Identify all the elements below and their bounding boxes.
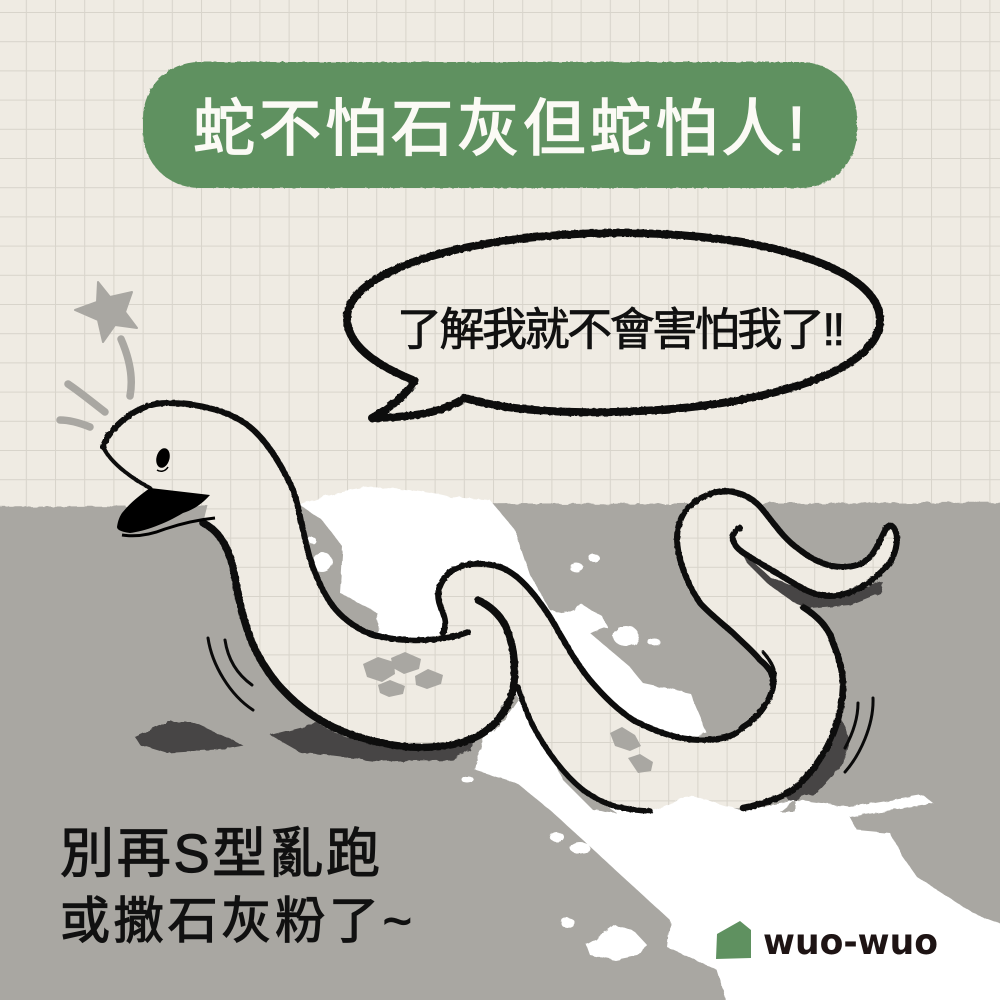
caption — [60, 824, 412, 949]
lime powder patch behind snake — [300, 487, 707, 760]
title banner — [143, 62, 857, 188]
snake body fill — [103, 403, 897, 811]
speech bubble text: 了解我就不會害怕我了!! — [397, 304, 845, 355]
motion lines by body — [208, 638, 873, 772]
snake mouth — [117, 488, 215, 536]
caption: 或撒石灰粉了~ — [60, 893, 412, 949]
snake eye — [154, 447, 172, 471]
speech bubble — [347, 233, 880, 418]
icon: grey star — [75, 282, 137, 342]
lime powder patch in front of snake — [462, 687, 1000, 1000]
impact marks — [60, 339, 131, 427]
logo wordmark: wuo-wuo — [763, 922, 938, 963]
logo — [716, 921, 938, 963]
caption: 別再S型亂跑 — [60, 824, 380, 884]
title text: 蛇不怕石灰但蛇怕人! — [193, 95, 805, 164]
snake outline — [103, 403, 897, 811]
tail shadow on body — [740, 550, 883, 608]
grey floor — [0, 502, 1000, 1000]
snake scale spots — [363, 652, 653, 773]
icon: green house — [716, 921, 751, 959]
snake cast shadows — [135, 720, 850, 802]
